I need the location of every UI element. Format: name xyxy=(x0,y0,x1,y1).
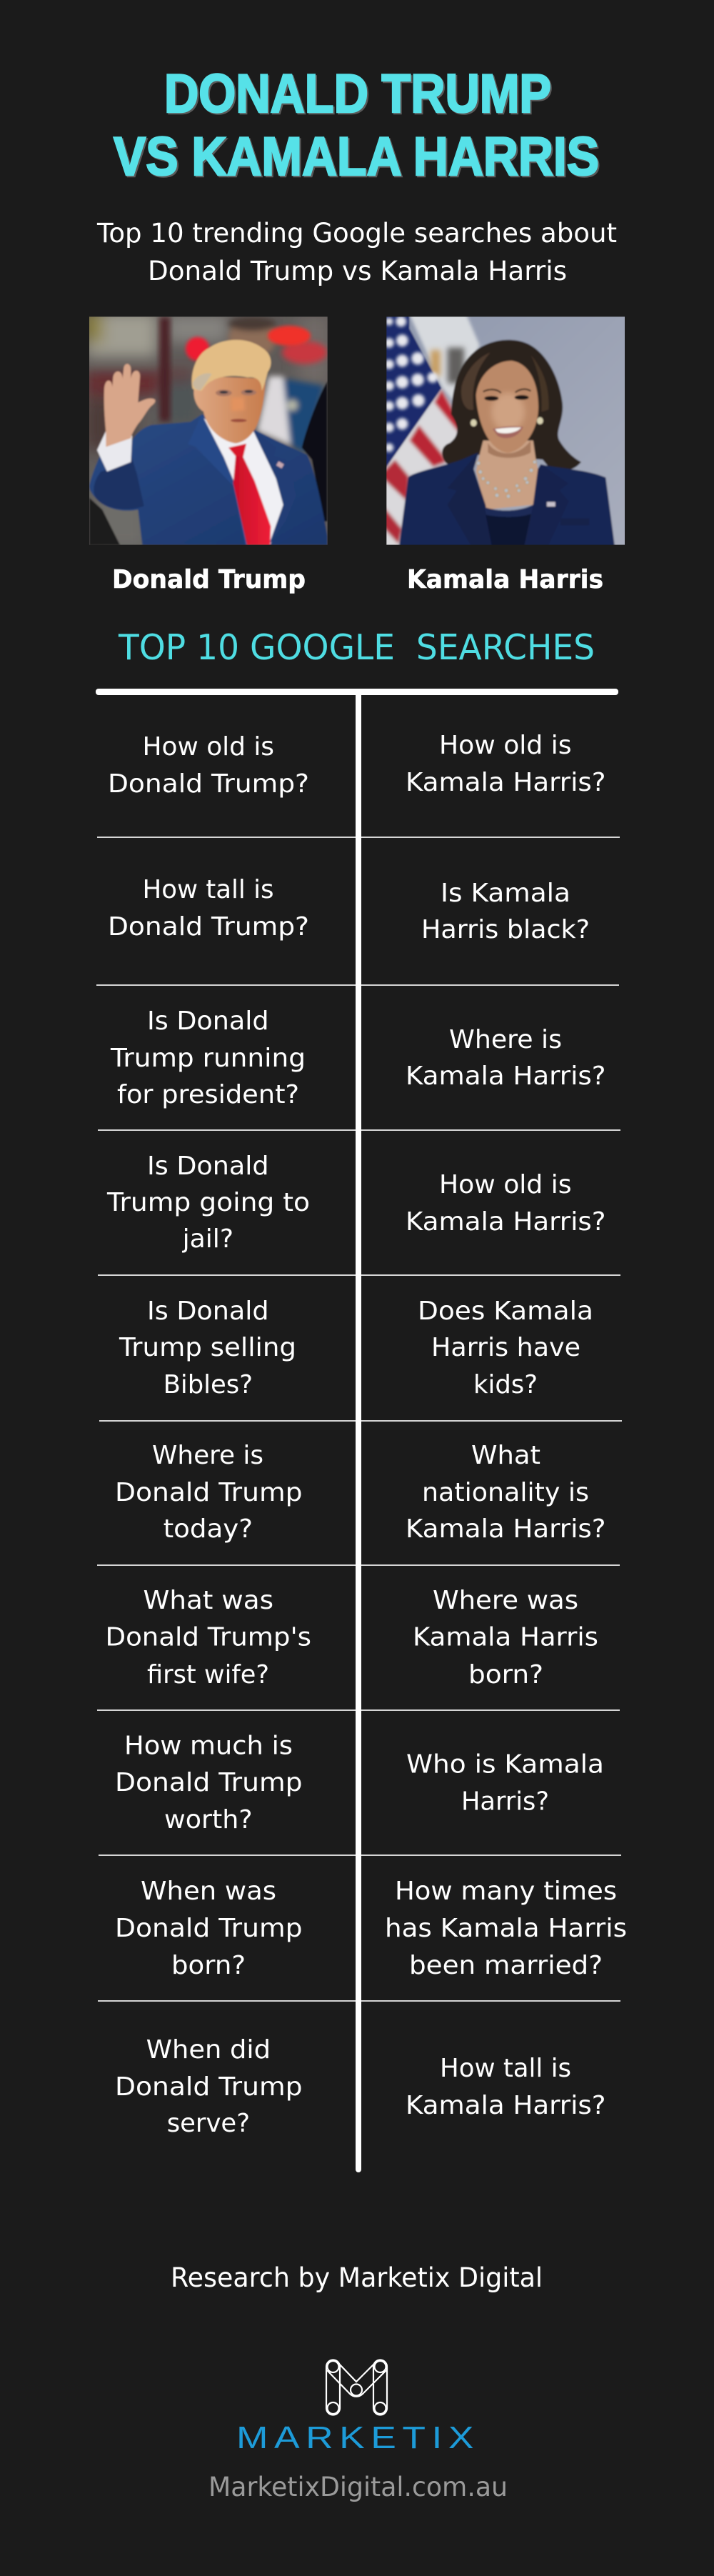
row 6 left: Where is xyxy=(152,1441,263,1470)
row 4 right xyxy=(406,1170,605,1237)
row 4 left xyxy=(106,1152,310,1254)
research credit: Research by Marketix Digital xyxy=(171,2262,543,2293)
photo: Donald Trump xyxy=(84,312,332,550)
row 8 right: Who is Kamala xyxy=(406,1750,604,1779)
row 5 right: Does Kamala xyxy=(418,1297,593,1326)
jacket xyxy=(398,451,478,545)
row 9 right: has Kamala Harris xyxy=(385,1914,627,1943)
title: VS KAMALA HARRIS xyxy=(114,126,599,187)
row 2 right: Is Kamala xyxy=(441,879,570,908)
neck and chest xyxy=(476,441,538,509)
row 4 left: jail? xyxy=(182,1224,233,1254)
row 8 right: Harris? xyxy=(461,1787,549,1816)
row 8 left: worth? xyxy=(164,1805,253,1834)
shirt xyxy=(202,416,283,545)
row 7 right: Kamala Harris xyxy=(413,1623,598,1652)
subtitle: Top 10 trending Google searches about xyxy=(96,218,617,249)
row 1 left: Donald Trump? xyxy=(108,769,309,799)
row 5 left xyxy=(119,1297,296,1399)
row 6 right: What xyxy=(471,1441,540,1470)
row 10 right: How tall is xyxy=(440,2054,571,2083)
row 6 right: nationality is xyxy=(422,1478,589,1507)
row 8 left: Donald Trump xyxy=(115,1768,303,1797)
row 3 right xyxy=(406,1025,605,1091)
row 4 left: Is Donald xyxy=(147,1152,268,1181)
face xyxy=(476,361,538,453)
row 5 right xyxy=(418,1297,593,1399)
row 7 right xyxy=(413,1586,598,1689)
row 1 left: How old is xyxy=(143,732,274,762)
name: Kamala Harris: Kamala Harris xyxy=(407,565,603,594)
row 2 right xyxy=(421,879,590,944)
facial features xyxy=(216,389,256,422)
row 2 right: Harris black? xyxy=(421,915,590,944)
row 5 left: Bibles? xyxy=(164,1370,253,1399)
row 10 left: Donald Trump xyxy=(115,2072,303,2102)
row 1 right: How old is xyxy=(439,731,571,760)
row 6 right: Kamala Harris? xyxy=(406,1514,605,1544)
row 10 right xyxy=(406,2054,605,2120)
hair xyxy=(192,340,271,391)
flag stripes xyxy=(383,388,459,550)
row 2 left: How tall is xyxy=(143,875,274,904)
row 6 left: today? xyxy=(164,1514,253,1544)
row 6 left: Donald Trump xyxy=(115,1478,303,1507)
subtitle: Donald Trump vs Kamala Harris xyxy=(148,256,567,286)
suit xyxy=(89,414,328,545)
row 8 left xyxy=(115,1732,303,1834)
row 9 right: been married? xyxy=(409,1951,603,1980)
row 4 right: Kamala Harris? xyxy=(406,1207,605,1237)
title: DONALD TRUMP xyxy=(164,64,551,124)
row 2 left xyxy=(108,875,309,942)
facial features xyxy=(471,389,543,438)
row 9 right: How many times xyxy=(395,1877,617,1906)
row 1 right: Kamala Harris? xyxy=(406,768,605,797)
row 7 right: Where was xyxy=(433,1586,578,1615)
row 7 right: born? xyxy=(468,1660,543,1689)
row 5 right: Harris have xyxy=(431,1333,580,1362)
flag backing xyxy=(411,312,480,402)
row 9 right xyxy=(385,1877,627,1980)
logo wordmark: MARKETIX xyxy=(236,2420,480,2455)
row 10 left: serve? xyxy=(167,2109,250,2138)
row 3 right: Where is xyxy=(449,1025,562,1054)
row 7 left xyxy=(106,1586,311,1689)
lapels xyxy=(188,414,247,545)
row 10 left: When did xyxy=(146,2035,271,2065)
row 6 left xyxy=(115,1441,303,1544)
row 9 left: Donald Trump xyxy=(115,1914,303,1943)
table: search comparison xyxy=(96,689,622,2172)
photo: Kamala Harris xyxy=(383,312,630,550)
row 1 right xyxy=(406,731,605,797)
name: Donald Trump: Donald Trump xyxy=(112,565,306,594)
flag canton xyxy=(383,312,441,471)
row 5 left: Trump selling xyxy=(119,1333,296,1362)
hand xyxy=(104,364,155,447)
inner top xyxy=(486,513,533,545)
row 5 left: Is Donald xyxy=(147,1297,268,1326)
row 7 left: first wife? xyxy=(147,1660,269,1689)
row 4 right: How old is xyxy=(439,1170,571,1199)
tie xyxy=(228,444,271,545)
row 9 left: When was xyxy=(141,1877,276,1906)
hair xyxy=(442,340,581,471)
row 3 left: Trump running xyxy=(110,1044,306,1073)
icon: Marketix M logo xyxy=(326,2360,387,2415)
necklace xyxy=(476,460,536,499)
row 10 right: Kamala Harris? xyxy=(406,2091,605,2120)
head xyxy=(193,376,266,444)
row 3 left: for president? xyxy=(117,1080,299,1109)
row 6 right xyxy=(406,1441,605,1544)
row 9 left: born? xyxy=(171,1951,246,1980)
subtitle xyxy=(96,218,617,286)
row 7 left: What was xyxy=(143,1586,273,1615)
row 3 left: Is Donald xyxy=(147,1007,268,1036)
website: MarketixDigital.com.au xyxy=(208,2472,508,2502)
section heading: TOP 10 GOOGLE SEARCHES xyxy=(118,627,595,668)
row 3 left xyxy=(110,1007,306,1109)
row 5 right: kids? xyxy=(473,1370,538,1399)
row 9 left xyxy=(115,1877,303,1980)
cuff xyxy=(97,431,132,471)
title xyxy=(114,64,599,187)
row 3 right: Kamala Harris? xyxy=(406,1062,605,1091)
row 8 right xyxy=(406,1750,604,1816)
row 2 left: Donald Trump? xyxy=(108,912,309,942)
row 1 left xyxy=(108,732,309,799)
row 4 left: Trump going to xyxy=(106,1188,310,1217)
row 10 left xyxy=(115,2035,303,2138)
row 7 left: Donald Trump's xyxy=(106,1623,311,1652)
row 8 left: How much is xyxy=(124,1732,293,1760)
